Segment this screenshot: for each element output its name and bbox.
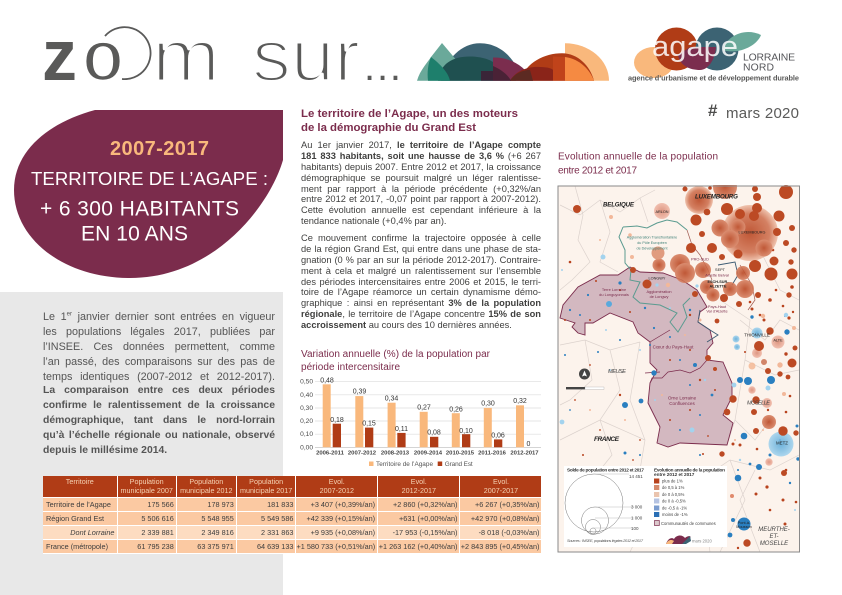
bar chart: annual variation: 0,40 — [300, 392, 313, 399]
bar chart: annual variation: 0,10 — [459, 428, 473, 435]
text block: article paragraph 1: 181 833 habitants, soit une hausse de 3,6 % (+6 267 — [301, 151, 541, 161]
map: annual population change: Agglomération Transfrontalière — [627, 236, 677, 240]
map: annual population change: MEUSE — [608, 369, 626, 375]
table: population figures: Evol. — [411, 477, 427, 486]
table: population figures: 2 339 881 — [141, 528, 174, 537]
bar chart: annual variation — [300, 378, 541, 468]
text block: article paragraph 1: ment par rapport à la période précédente (+0,32%/an — [301, 184, 541, 194]
map labels: LUXEMBOURG — [695, 194, 738, 200]
text block: article paragraph 2: gnation (0 % par an sur la période 2012-2017). Contraire- — [301, 255, 541, 265]
map: annual population change: MOSELLE — [760, 541, 789, 547]
table: population figures: +42 339 (+0,15%/an) — [307, 514, 375, 523]
panel: grey intro background — [0, 292, 283, 595]
heading: bar chart title: Variation annuelle (%) de la population par — [301, 349, 491, 360]
map: annual population change: de Longwy — [650, 294, 668, 299]
map: annual population change: Agglomération — [646, 289, 672, 294]
heading: map title: entre 2012 et 2017 — [558, 166, 637, 176]
table: population figures: 64 639 133 — [257, 542, 293, 551]
bar chart: annual variation: 0,15 — [362, 420, 376, 428]
chart legend: Grand Est — [445, 461, 473, 468]
table: population figures: +2 843 895 (+0,45%/an) — [461, 542, 539, 551]
legend: de 0 à -0,5% — [662, 498, 686, 504]
map: annual population change: MEURTHE- — [758, 527, 790, 533]
text block: article paragraph 2: accroissement au cours des 10 dernières années. — [301, 320, 512, 330]
text block: article paragraph 1: entre 2012 et 2017, -0,07 point par rapport à 2007-2012). — [301, 194, 541, 204]
bar chart: annual variation: 0,11 — [395, 426, 408, 433]
commune boundaries — [560, 186, 799, 552]
series: Grand Est — [333, 424, 502, 447]
logo: agape Lorraine Nord: agence d’urbanisme et de développement durable — [628, 74, 799, 82]
bar chart: annual variation: 0,27 — [417, 404, 431, 412]
callout: 2007-2017 + 6 300 habitants: + 6 300 HABITANTS — [40, 198, 239, 220]
legend: Communautés de communes — [661, 521, 716, 526]
map: annual population change: ET- — [769, 534, 779, 540]
map: annual population change: ARLON — [655, 210, 669, 214]
map: annual population change: de Développement — [637, 246, 667, 250]
map: annual population change: LUXEMBOURG — [738, 230, 766, 234]
table: population figures — [43, 476, 541, 554]
legend: moins de -1% — [662, 512, 688, 517]
bar chart: annual variation: 0,30 — [300, 405, 313, 412]
bar chart: annual variation: 2010-2015 — [446, 450, 475, 456]
text block: article paragraph 2: ment à cela et malgré un ralentissement sur l’ensemble — [301, 266, 541, 276]
text block: article paragraph 1: Cette évolution annuelle est cependant inférieure à la — [301, 205, 541, 215]
table: population figures: 5 506 616 — [141, 514, 174, 523]
table: population figures: +42 970 (+0,08%/an) — [471, 514, 539, 523]
table: population figures: France (métropole) — [46, 542, 108, 551]
bar chart: annual variation: 0,00 — [300, 444, 313, 451]
text block: article paragraph 1 — [301, 140, 542, 226]
heading: map title — [558, 152, 718, 176]
title: zoom sur...: m — [152, 16, 220, 95]
text block: article paragraph 1: démographique se poursuit malgré un léger ralentisse- — [301, 173, 541, 183]
text block: intro — [43, 311, 275, 456]
map: annual population change: Mousson — [736, 525, 752, 529]
table: population figures: municipale 2017 — [240, 486, 292, 494]
text block: intro: démographique, tant dans le nord-lorrain — [43, 415, 275, 426]
bar chart: annual variation: 2009-2014 — [414, 450, 443, 456]
table: population figures: 61 795 238 — [137, 542, 174, 551]
table: population figures: Evol. — [329, 477, 345, 486]
bar chart: annual variation: 2008-2013 — [381, 450, 410, 456]
heading: bar chart title: période intercensitaire — [301, 362, 400, 373]
scale bar — [566, 387, 604, 389]
map: annual population change: MOSELLE — [747, 400, 770, 406]
title: zoom sur...: o — [82, 16, 124, 95]
table: population figures: +631 (+0,00%/an) — [399, 514, 457, 523]
map: annual population change: PRO-SUD — [691, 256, 709, 262]
table: population figures: Population — [189, 477, 223, 486]
text block: article paragraph 2: graphique : ainsi en représentant 3% de la population — [301, 298, 541, 308]
bar chart: annual variation: 0,06 — [491, 432, 505, 440]
logo: agape Lorraine Nord: LORRAINE — [743, 52, 795, 64]
text block: article paragraph 2 — [301, 233, 541, 330]
callout: 2007-2017 + 6 300 habitants: TERRITOIRE DE L’AGAPE : — [31, 168, 268, 189]
map labels: BELGIQUE — [603, 202, 635, 208]
title: zoom sur...: sur — [252, 16, 360, 95]
map: annual population change: du Longuyonnais — [599, 292, 629, 297]
legend: Solde de population entre 2012 et 2017 — [567, 468, 644, 472]
map: annual population change: Confluences — [669, 401, 695, 406]
table: population figures: -17 953 (-0,15%/an) — [393, 528, 457, 537]
date: mars 2020: mars 2020 — [726, 105, 799, 122]
legend: 3 000 — [631, 504, 643, 510]
logo: agape Lorraine Nord — [628, 28, 799, 82]
map: annual population change: Val d’Alzette — [706, 308, 728, 314]
bar chart: annual variation: 2012-2017 — [510, 450, 539, 456]
text block: article paragraph 1: Au 1er janvier 2017, le territoire de l’Agape compte — [301, 140, 541, 150]
text block: intro: qu’à l’échelle régionale ou nationale, observé — [43, 430, 275, 441]
table: population figures: 175 566 — [147, 500, 174, 509]
table: population figures: 2 349 816 — [201, 528, 234, 537]
icon: compass — [579, 368, 590, 380]
legend: de -0,5 à -1% — [662, 506, 687, 510]
table: population figures: -8 018 (-0,03%/an) — [479, 528, 539, 537]
legend: entre 2012 et 2017 — [654, 472, 695, 477]
bar chart: annual variation: 0,34 — [385, 396, 398, 402]
bar chart: annual variation: 0 — [527, 441, 531, 448]
text block: article paragraph 2: toire de l’Agape réamorce un certain dynamisme démo- — [301, 287, 541, 297]
legend: mars 2020 — [692, 538, 712, 544]
bar chart: annual variation: 0,48 — [320, 378, 334, 384]
legend: 1 000 — [631, 516, 643, 520]
dark blue boundary — [698, 262, 738, 342]
table: population figures: +9 935 (+0,08%/an) — [311, 528, 375, 537]
heading: le territoire de l'Agape: de la démographie du Grand Est — [301, 122, 476, 134]
table: population figures: +1 580 733 (+0,51%/an) — [296, 542, 375, 551]
legend: 14 451 — [629, 474, 643, 479]
text block: intro: confirme le ralentissement de la croissance — [43, 400, 275, 411]
table: population figures: 63 375 971 — [197, 542, 234, 551]
map: annual population change: THIONVILLE — [744, 332, 770, 338]
date: mars 2020: # — [708, 101, 718, 120]
map: annual population change: Alzette Belval — [705, 272, 729, 278]
logo: agape Lorraine Nord: agape — [652, 31, 738, 63]
map: annual population change: LONGWY — [649, 276, 666, 280]
legend: Sources : INSEE, populations légales 2012 et 2017 — [567, 538, 644, 543]
text block: intro: depuis le millésime 2014. — [43, 445, 167, 456]
table: population figures: +6 267 (+0,35%/an) — [475, 500, 539, 509]
table: population figures: +2 860 (+0,32%/an) — [393, 500, 457, 509]
bar chart: annual variation: 0,39 — [353, 388, 366, 396]
table: population figures: Population — [249, 477, 283, 486]
map: annual population change: ALTE — [773, 338, 783, 342]
table: population figures: 181 833 — [267, 500, 293, 509]
legend: de 0 à 0,5% — [662, 492, 685, 497]
heading: bar chart title — [301, 349, 491, 373]
table: population figures: 178 973 — [207, 500, 234, 509]
text block: intro: les populations légales 2017, publiées par — [43, 326, 275, 338]
legend — [564, 466, 727, 547]
table: population figures: Région Grand Est — [46, 514, 104, 523]
text block: article paragraph 2: de la région Grand Est, qui entre dans une phase de sta- — [301, 244, 541, 254]
table: population figures: municipale 2007 — [120, 486, 173, 494]
map labels — [594, 194, 738, 443]
table: population figures: +3 407 (+0,39%/an) — [311, 500, 375, 509]
legend: 100 — [631, 526, 639, 531]
table: population figures: 5 548 955 — [201, 514, 234, 523]
table: population figures: 2012-2017 — [402, 486, 436, 494]
table: population figures: Population — [130, 477, 164, 486]
table: population figures: municipale 2012 — [180, 486, 232, 494]
text block: intro: l’an passé, des comparaisons sur des pas de — [43, 356, 275, 368]
title: zoom sur...: ... — [364, 45, 401, 89]
text block: intro: l’INSEE. Ces données permettent, comme — [43, 341, 275, 353]
date: mars 2020 — [708, 101, 799, 122]
bar chart: annual variation: 2011-2016 — [478, 450, 507, 456]
table: population figures: Territoire de l’Agape — [46, 500, 111, 509]
bar chart: annual variation: 0,50 — [300, 378, 313, 386]
table: population figures: 2007-2012 — [320, 486, 354, 494]
map: annual population change: Orne Lorraine — [668, 396, 697, 400]
chart legend: Territoire de l’Agape — [376, 461, 433, 468]
bar chart: annual variation: 0,20 — [300, 418, 313, 425]
text block: article paragraph 2: régionale, le territoire de l’Agape concentre 15% de son — [301, 309, 541, 319]
map: annual population change: Cœur du Pays-Haut — [653, 344, 694, 350]
text block: intro: Le 1er janvier dernier sont entrées en vigueur — [43, 311, 275, 323]
text block: article paragraph 1: habitants) depuis 2007. Entre 2012 et 2017, la croissance — [301, 162, 541, 172]
series: Territoire de l'Agape — [323, 384, 524, 447]
heading: le territoire de l'Agape: Le territoire de l’Agape, un des moteurs — [301, 108, 518, 120]
text block: intro: La comparaison entre ces deux périodes — [43, 385, 275, 396]
map labels: FRANCE — [594, 436, 620, 443]
chart legend — [369, 461, 473, 468]
callout: 2007-2017 + 6 300 habitants: EN 10 ANS — [81, 222, 188, 246]
small dots — [564, 186, 797, 549]
medium circles — [573, 185, 799, 547]
table: population figures: +1 263 162 (+0,40%/an) — [379, 542, 457, 551]
bar chart: annual variation: 0,32 — [513, 398, 527, 405]
legend: Evolution annuelle de la population — [654, 468, 725, 472]
table: population figures: 2 331 863 — [261, 528, 293, 537]
bar chart: annual variation: 0,18 — [330, 417, 344, 424]
bar chart: annual variation: 2006-2011 — [316, 450, 345, 456]
callout: 2007-2017 + 6 300 habitants: 2007-2017 — [110, 138, 209, 160]
text block: article paragraph 2: des périodes intercensitaires entre 2006 et 2015, le terri- — [301, 277, 541, 287]
map: annual population change: Pont-à- — [738, 521, 751, 525]
bar chart: annual variation: 0,08 — [427, 430, 441, 436]
map: annual population change: ESCH-SUR- — [707, 280, 729, 284]
title: zoom sur... — [42, 16, 401, 95]
table: population figures: 2007-2017 — [484, 486, 518, 494]
map: annual population change: du Pôle Européen — [637, 241, 667, 245]
bar chart: annual variation: 0,10 — [300, 431, 313, 438]
text block: article paragraph 2: Ce mouvement confirme la trajectoire opposée à celle — [301, 233, 541, 243]
table: population figures: Evol. — [493, 477, 509, 486]
legend: plus de 1% — [662, 478, 683, 484]
big growth circles — [652, 175, 794, 466]
bar chart: annual variation: 0,26 — [449, 406, 463, 414]
map: annual population change — [558, 185, 800, 552]
heading: map title: Evolution annuelle de la population — [558, 152, 718, 162]
text block: intro: temps identiques (2007-2012 et 2012-2017). — [43, 371, 275, 383]
bar chart: annual variation: 2007-2012 — [348, 450, 377, 456]
map: annual population change: Pays-Haut — [708, 304, 727, 309]
map: annual population change: METZ — [776, 440, 788, 446]
title: zoom sur...: z — [42, 17, 77, 95]
map: annual population change: Terre Lorraine — [602, 287, 626, 292]
legend: de 0,5 à 1% — [662, 485, 685, 490]
table: population figures: Dont Lorraine — [70, 528, 114, 537]
heading: le territoire de l'Agape — [301, 108, 518, 134]
text block: article paragraph 1: tendance nationale (+0,4% par an). — [301, 216, 446, 226]
table: population figures: Territoire — [66, 477, 94, 486]
teal boundary — [619, 220, 690, 332]
bar chart: annual variation: 0,30 — [481, 400, 495, 408]
logo: agape Lorraine Nord: NORD — [743, 62, 774, 74]
callout: 2007-2017 + 6 300 habitants — [14, 110, 283, 278]
icon: decorative hills banner — [417, 43, 609, 81]
table: population figures: 5 549 586 — [261, 514, 293, 523]
map: annual population change: ALZETTE — [709, 284, 727, 288]
map: annual population change: SEPT — [715, 268, 726, 272]
Agape territory — [560, 267, 733, 447]
